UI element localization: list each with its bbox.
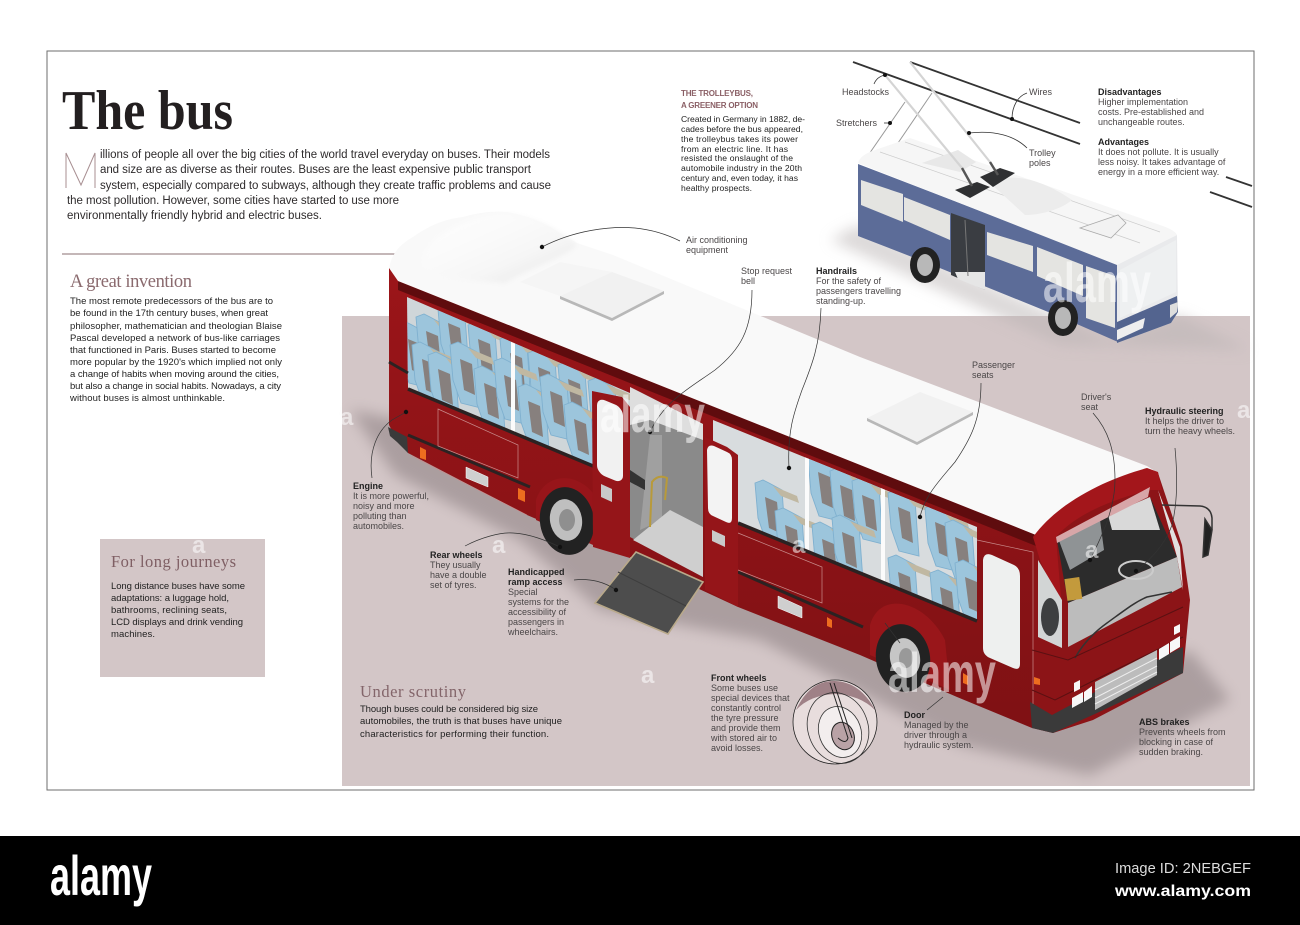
wheelchair ramp — [595, 552, 703, 634]
bus labels: systems for the — [508, 597, 569, 607]
bus labels: ramp access — [508, 577, 563, 587]
bus labels: wheelchairs. — [507, 627, 558, 637]
bus labels: automobiles. — [353, 521, 404, 531]
bus labels: polluting than — [353, 511, 407, 521]
roof — [389, 212, 1158, 535]
section: a great invention: A great invention — [70, 272, 192, 292]
trolleybus labels: unchangeable routes. — [1098, 117, 1185, 127]
headlights — [1072, 624, 1180, 708]
bus labels: Handrails — [816, 266, 857, 276]
watermarks: a — [1085, 537, 1099, 564]
pink background panel — [342, 316, 1250, 786]
wipers — [1075, 592, 1172, 658]
rear wheel — [535, 483, 599, 559]
section: the trolleybus text: the trolleybus takes its power — [681, 134, 798, 144]
driver door window — [983, 554, 1020, 669]
trolleybus door opening — [951, 213, 985, 290]
bus labels: special devices that — [711, 693, 790, 703]
section: the trolleybus text: THE TROLLEYBUS, — [681, 89, 753, 98]
section: the trolleybus text — [681, 89, 805, 193]
bus labels: hydraulic system. — [904, 740, 974, 750]
trolleybus labels: less noisy. It takes advantage of — [1098, 157, 1226, 167]
trolleybus roof — [858, 138, 1177, 265]
stretchers — [867, 93, 932, 157]
front wheel — [871, 620, 935, 696]
bus labels: They usually — [430, 560, 481, 570]
dark roof band — [398, 281, 1036, 546]
panel: for long journeys: adaptations: a luggage hold, — [111, 593, 229, 604]
watermarks: alamy — [1043, 251, 1151, 314]
bus labels: standing-up. — [816, 296, 866, 306]
section: a great invention: without buses is almost unthinkable. — [69, 393, 225, 404]
bus labels: Special — [508, 587, 538, 597]
footer logo: alamy — [50, 844, 152, 907]
bus labels: Air conditioning — [686, 235, 748, 245]
trolleybus wheels — [910, 247, 1078, 336]
footer image id: Image ID: 2NEBGEF — [1115, 860, 1251, 877]
panel: for long journeys: Long distance buses have some — [111, 581, 245, 592]
watermarks: a — [340, 404, 354, 431]
front door leaf — [705, 437, 738, 607]
footer band — [0, 836, 1300, 925]
bus labels: Stop request — [741, 266, 793, 276]
vents — [466, 467, 802, 618]
section: under scrutiny: automobiles, the truth is that buses have unique — [360, 716, 562, 727]
panel: for long journeys: LCD displays and drink vending — [111, 617, 243, 628]
section: under scrutiny: Under scrutiny — [360, 682, 467, 701]
bus labels: It helps the driver to — [1145, 416, 1224, 426]
bus front body — [1032, 470, 1190, 733]
bus labels: ABS brakes — [1139, 717, 1190, 727]
bus labels: turn the heavy wheels. — [1145, 426, 1235, 436]
intro text block: illions of people all over the big cities of the world travel everyday on buses. Their models — [100, 149, 550, 161]
handrail yellow — [650, 477, 667, 527]
bus labels: Managed by the — [904, 720, 969, 730]
trolleybus callout lines — [874, 75, 1027, 148]
trolleybus callout dots — [883, 73, 1014, 135]
bus labels: passengers in — [508, 617, 564, 627]
trolleybus labels: poles — [1029, 158, 1051, 168]
bus labels: It is more powerful, — [353, 491, 429, 501]
section: the trolleybus text: healthy prospects. — [681, 183, 752, 193]
bus labels: have a double — [430, 570, 487, 580]
bus labels: sudden braking. — [1139, 747, 1203, 757]
bus labels: Passenger — [972, 360, 1015, 370]
rear bumper — [388, 427, 408, 453]
bus labels: driver through a — [904, 730, 967, 740]
intro text block: system, especially compared to subways, although they create traffic problems and cause — [100, 180, 551, 192]
panel outlines — [412, 409, 1033, 715]
bus labels: equipment — [686, 245, 729, 255]
section: the trolleybus text: cades before the bus appeared, — [681, 124, 803, 134]
front trim lines — [1032, 607, 1183, 700]
bus labels: Door — [904, 710, 925, 720]
bus labels: constantly control — [711, 703, 781, 713]
watermarks: a — [492, 532, 506, 559]
bus shadow — [350, 410, 1230, 775]
bus labels: seats — [972, 370, 994, 380]
orange side lights — [420, 447, 1040, 685]
bus labels: the tyre pressure — [711, 713, 779, 723]
intro text block: the most pollution. However, some cities have started to use more — [67, 195, 399, 207]
bus labels: passengers travelling — [816, 286, 901, 296]
intro text block: environmentally friendly hybrid and electric buses. — [67, 210, 322, 222]
section: the trolleybus text: resisted the onslaught of the — [681, 153, 793, 163]
bus labels: set of tyres. — [430, 580, 477, 590]
bus labels: Prevents wheels from — [1139, 727, 1226, 737]
bus labels: noisy and more — [353, 501, 415, 511]
middle window with seats — [713, 420, 977, 620]
front grille — [1095, 650, 1157, 710]
bus labels: accessibility of — [508, 607, 567, 617]
panel: for long journeys: For long journeys — [111, 552, 236, 571]
trolleybus shadow — [830, 225, 1250, 350]
roof hatch rear — [520, 262, 664, 321]
watermarks: a — [792, 532, 806, 559]
bus labels: For the safety of — [816, 276, 882, 286]
section: a great invention: Pascal developed a network of bus-like carriages — [70, 333, 280, 344]
trolleybus windshield — [1120, 240, 1176, 318]
intro text block: and size are as diverse as their routes. Buses are the least expensive public transport — [100, 164, 532, 176]
watermarks: a — [641, 662, 655, 689]
bus callout dots — [404, 245, 1138, 592]
bus labels: Rear wheels — [430, 550, 483, 560]
section: a great invention: a change of habits when moving around the cities, — [70, 369, 279, 380]
trolleybus labels: Wires — [1029, 87, 1052, 97]
watermarks: a — [192, 532, 206, 559]
windshield — [1056, 487, 1183, 658]
bus labels: bell — [741, 276, 755, 286]
trolleybus labels: Trolley — [1029, 148, 1056, 158]
watermarks — [192, 251, 1251, 704]
overhead wires — [853, 62, 1252, 207]
rear door — [592, 391, 630, 558]
front wheel arch — [870, 604, 950, 690]
windshield red arch — [1033, 468, 1162, 610]
section: a great invention: but also a change in social habits. Nowadays, a city — [70, 381, 281, 392]
trolleybus side — [858, 164, 1118, 342]
bus labels: with stored air to — [710, 733, 777, 743]
trolley poles — [885, 62, 990, 168]
door opening interior — [630, 387, 703, 577]
trolleybus windows — [861, 180, 1115, 328]
trolleybus labels: Advantages — [1098, 137, 1149, 147]
trolleybus front — [1117, 235, 1178, 343]
trolleybus labels: Stretchers — [836, 118, 878, 128]
section: under scrutiny: Though buses could be considered big size — [360, 704, 538, 715]
section: a great invention: more popular by the 1920's which implied not only — [70, 357, 282, 368]
rear wheel arch — [536, 478, 600, 548]
section: a great invention: The most remote predecessors of the bus are to — [70, 296, 273, 307]
section: the trolleybus text: century and, even today, it has — [681, 173, 798, 183]
trolleybus labels: It does not pollute. It is usually — [1098, 147, 1219, 157]
bus side body — [389, 268, 1036, 728]
section: a great invention: philosopher, mathematician and theologian Blaise — [70, 321, 282, 332]
inset: front wheel detail — [793, 680, 879, 772]
footer url: www.alamy.com — [1114, 883, 1251, 900]
section: under scrutiny: characteristics for performing their function. — [360, 729, 549, 740]
right mirror — [1162, 505, 1212, 557]
pole bases — [955, 168, 1015, 198]
section: under scrutiny — [360, 682, 562, 740]
bus labels: and provide them — [711, 723, 781, 733]
trolleybus labels: Headstocks — [842, 87, 890, 97]
front bumper — [1030, 647, 1183, 733]
section: the trolleybus text: Created in Germany in 1882, de- — [681, 114, 805, 124]
section: a great invention: that functioned in Paris. Buses started to become — [70, 345, 276, 356]
side glass — [1158, 490, 1183, 590]
section: a great invention: be found in the 17th century buses, when great — [70, 308, 268, 319]
drop cap M — [66, 153, 95, 188]
bus labels: seat — [1081, 402, 1099, 412]
bus labels: avoid losses. — [711, 743, 763, 753]
bus labels: blocking in case of — [1139, 737, 1214, 747]
page frame — [47, 51, 1254, 790]
panel: for long journeys: machines. — [111, 629, 155, 640]
section: a great invention — [69, 272, 282, 404]
illustration: trolleybus — [830, 62, 1252, 350]
section: the trolleybus text: A GREENER OPTION — [681, 101, 758, 110]
trolleybus labels — [836, 87, 1226, 177]
rear window with seats — [407, 297, 630, 464]
lower dark stripes — [389, 362, 977, 627]
roof hatch front — [867, 392, 973, 445]
panel: for long journeys — [100, 539, 265, 677]
title: The bus — [62, 80, 233, 142]
dashboard — [1068, 557, 1182, 647]
intro text block — [66, 149, 551, 222]
bus labels: Front wheels — [711, 673, 767, 683]
bus labels: Some buses use — [711, 683, 778, 693]
bus labels: Engine — [353, 481, 383, 491]
bus labels — [353, 235, 1235, 757]
side front window — [1038, 560, 1062, 648]
air conditioning bump — [422, 213, 577, 283]
section: the trolleybus text: from an electric line. It has — [681, 144, 788, 154]
section: the trolleybus text: automobile industry in the 20th — [681, 163, 802, 173]
trolleybus labels: energy in a more efficient way. — [1098, 167, 1219, 177]
trolleybus labels: Disadvantages — [1098, 87, 1162, 97]
panel: for long journeys: bathrooms, reclining seats, — [111, 605, 227, 616]
bus callout lines — [371, 228, 1177, 710]
illustration: main red bus — [350, 212, 1230, 775]
watermarks: a — [1237, 397, 1251, 424]
bus labels: Hydraulic steering — [1145, 406, 1224, 416]
steering wheel — [1119, 561, 1153, 579]
bus labels: Driver's — [1081, 392, 1112, 402]
watermarks: alamy — [888, 641, 996, 704]
watermarks: alamy — [600, 386, 705, 444]
driver seat — [1064, 577, 1082, 601]
bus labels: Handicapped — [508, 567, 565, 577]
trolleybus labels: costs. Pre-established and — [1098, 107, 1204, 117]
trolleybus labels: Higher implementation — [1098, 97, 1188, 107]
